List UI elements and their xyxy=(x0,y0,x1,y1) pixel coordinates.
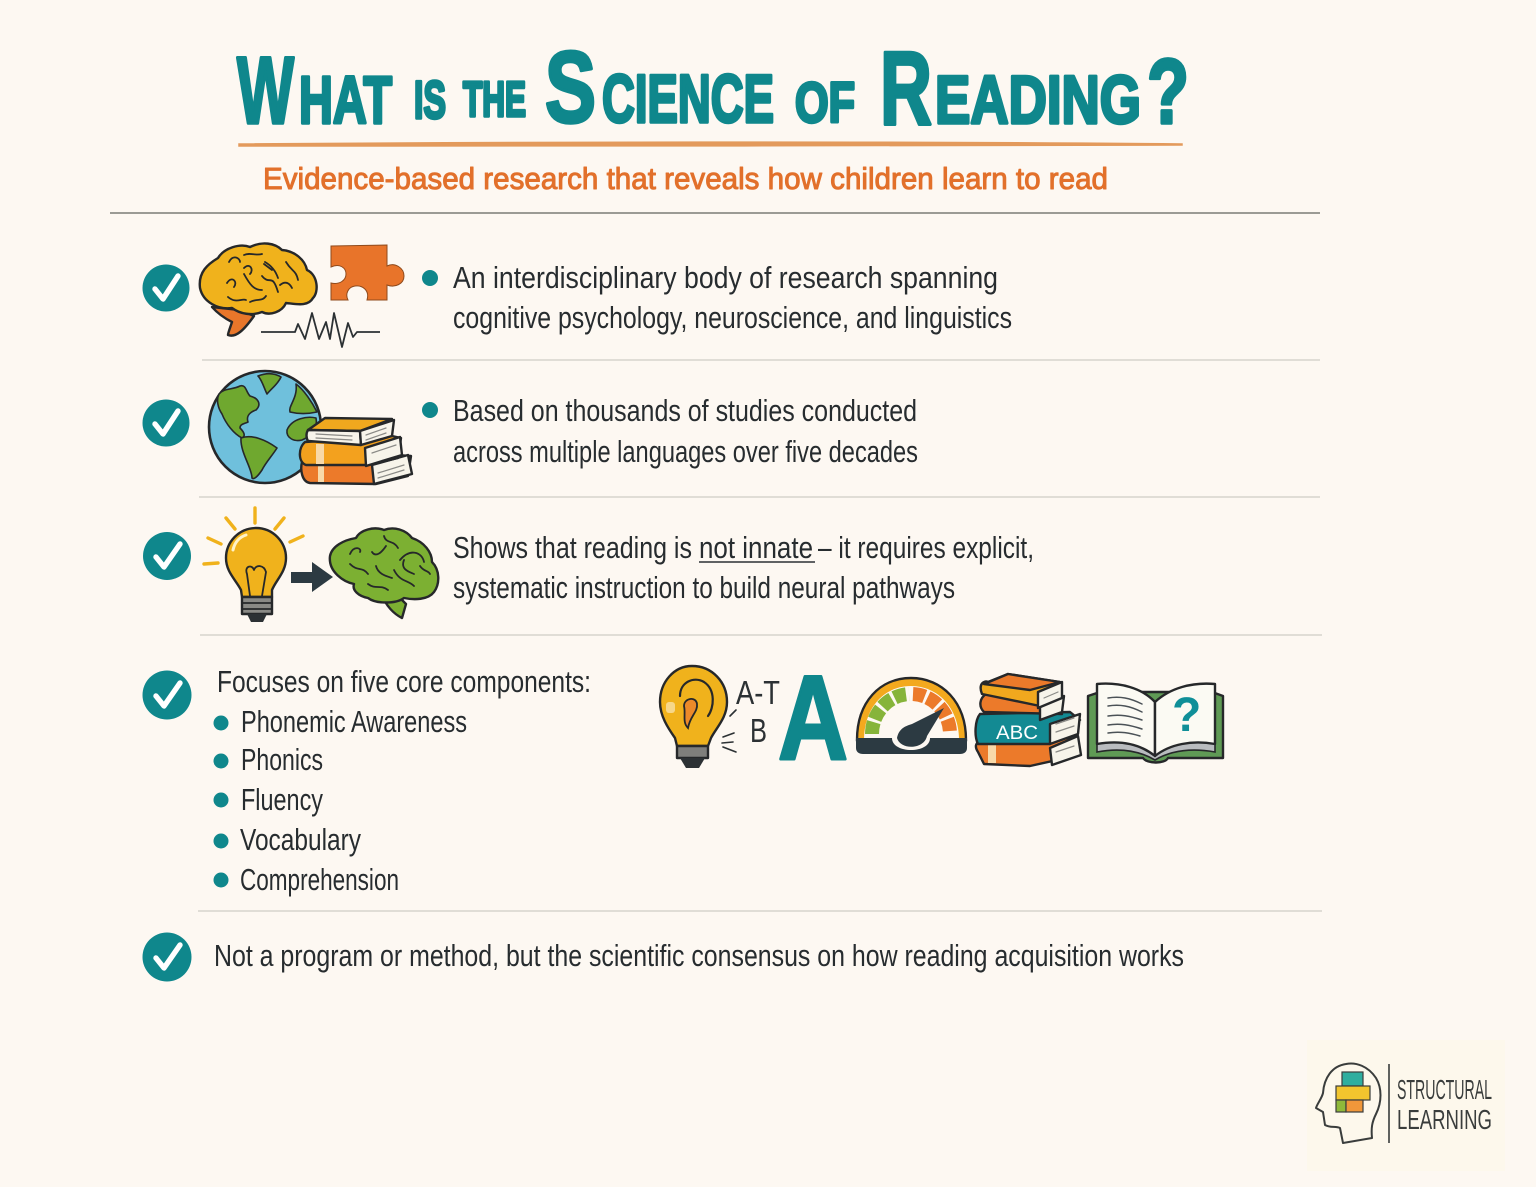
title: CIENCE xyxy=(602,61,774,137)
title underline xyxy=(239,142,1182,146)
icon: letters: B xyxy=(750,712,767,749)
icon: ear bulb xyxy=(660,666,727,768)
subtitle: Evidence-based research that reveals how children learn to read xyxy=(263,161,1108,196)
icon: stacked books xyxy=(300,418,412,484)
icon: check badge 1 xyxy=(142,264,190,312)
logo wordmark xyxy=(1397,1074,1492,1135)
heading: components: Focuses on five core components: xyxy=(217,664,591,699)
panel: consensus row xyxy=(142,932,1184,982)
panel: studies row xyxy=(142,371,918,484)
icon: check badge 4 xyxy=(142,670,192,720)
icon: puzzle piece xyxy=(331,245,404,300)
list: components: Phonics xyxy=(241,742,323,777)
title: W xyxy=(237,38,294,144)
text block: studies: Based on thousands of studies conducted xyxy=(453,393,917,428)
icon: check badge 5 xyxy=(142,932,192,982)
icon: yellow brain with wave xyxy=(200,243,380,347)
icon: ABC books xyxy=(976,674,1081,766)
icon: light bulb xyxy=(204,508,303,622)
icon: big letter A: A xyxy=(778,651,848,785)
text block: not innate xyxy=(453,530,1034,605)
logo wordmark: LEARNING xyxy=(1397,1104,1492,1135)
icon: head with blocks xyxy=(1316,1064,1380,1143)
title: OF xyxy=(795,71,855,135)
icon: open book with question mark: ? xyxy=(1172,689,1201,742)
title: S xyxy=(545,32,596,144)
title: THE xyxy=(463,73,526,127)
icon: ABC books: ABC xyxy=(996,723,1038,744)
text block: research xyxy=(453,260,1012,335)
icon: letters: A-T xyxy=(736,674,780,711)
list: components: Phonemic Awareness xyxy=(241,704,467,739)
icon: letters xyxy=(722,674,780,752)
text block: not innate: systematic instruction to build neural pathways xyxy=(453,570,955,605)
list: components: Comprehension xyxy=(240,862,399,897)
icon: fluency gauge xyxy=(856,678,967,754)
text block: not innate: Shows that reading is xyxy=(453,530,692,565)
title xyxy=(237,31,1189,147)
text block: not innate: not innate xyxy=(699,530,813,565)
bullet xyxy=(422,270,438,286)
icon: open book with question mark xyxy=(1088,684,1223,762)
text block: studies xyxy=(453,393,918,469)
title: ? xyxy=(1147,41,1189,143)
text block: not innate: – it requires explicit, xyxy=(818,530,1034,565)
title: EADING xyxy=(935,62,1141,138)
icon: check badge 2 xyxy=(142,400,190,446)
logo: Structural Learning xyxy=(1307,1040,1505,1171)
list: components xyxy=(214,704,467,897)
title: IS xyxy=(414,71,446,130)
text block: research: cognitive psychology, neuroscience, and linguistics xyxy=(453,300,1012,335)
list: components: Fluency xyxy=(241,782,323,817)
arrow xyxy=(291,562,333,592)
icon: globe xyxy=(209,371,321,483)
text block: research: An interdisciplinary body of research spanning xyxy=(453,260,998,295)
icon: green brain xyxy=(330,528,438,618)
icon: check badge 3 xyxy=(143,532,191,580)
panel: five core components xyxy=(142,651,1223,897)
text block: studies: across multiple languages over five decades xyxy=(453,434,918,469)
bullet xyxy=(422,402,438,418)
list: components: Vocabulary xyxy=(240,822,361,857)
title: HAT xyxy=(299,63,392,138)
title: R xyxy=(880,31,932,147)
panel: not innate row xyxy=(143,508,1034,622)
text block: consensus: Not a program or method, but the scientific consensus on how reading acquisition works xyxy=(214,938,1184,973)
panel: research row xyxy=(142,243,1012,347)
